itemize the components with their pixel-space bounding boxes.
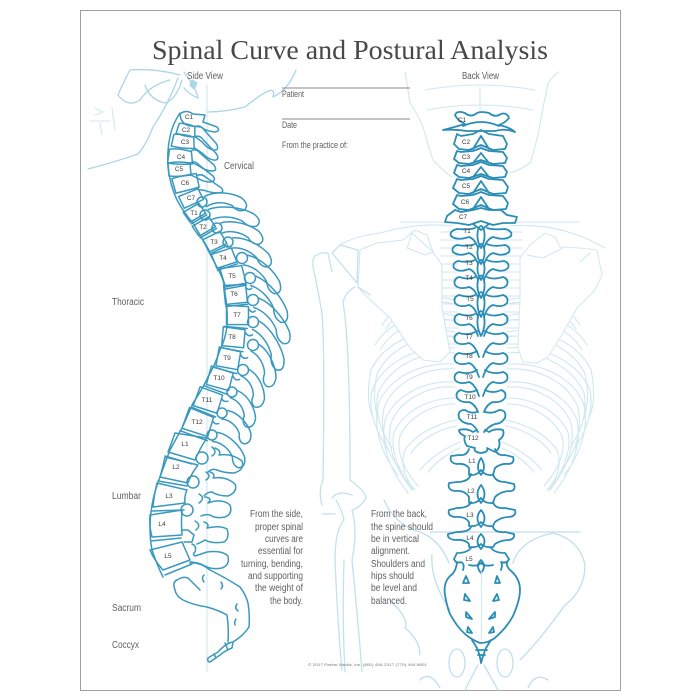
front edge of vertebral column bbox=[150, 113, 227, 577]
T8 side bbox=[219, 327, 281, 388]
C2 side bbox=[176, 122, 221, 151]
T12 side bbox=[180, 407, 250, 470]
C5 side bbox=[168, 162, 214, 182]
side view paragraph: the weight of bbox=[255, 583, 303, 594]
T2 back bbox=[452, 244, 510, 264]
side view paragraph: the body. bbox=[270, 596, 303, 607]
side view paragraph: curves are bbox=[265, 534, 303, 545]
T12 back bbox=[459, 429, 504, 453]
C7 back bbox=[445, 208, 517, 230]
C3 side bbox=[171, 133, 220, 161]
T11 side: T11 bbox=[202, 397, 213, 404]
T10 back bbox=[456, 390, 506, 412]
T11 side bbox=[191, 386, 256, 446]
back view paragraph: alignment. bbox=[371, 546, 410, 557]
L1 back: L1 bbox=[468, 458, 476, 465]
back view paragraph: be level and bbox=[371, 583, 417, 594]
L5 side: L5 bbox=[164, 553, 172, 560]
region labels: Cervical bbox=[224, 161, 254, 172]
T4 side: T4 bbox=[219, 255, 227, 262]
page frame bbox=[80, 10, 620, 690]
L2 back bbox=[449, 474, 515, 503]
L3 back: L3 bbox=[466, 512, 474, 519]
T9 side bbox=[213, 347, 269, 409]
ribcage, left side bbox=[368, 232, 460, 493]
L2 back: L2 bbox=[467, 488, 475, 495]
region labels: Thoracic bbox=[112, 297, 144, 308]
pelvis bbox=[384, 500, 585, 690]
L3 side: L3 bbox=[165, 493, 173, 500]
back view paragraph: be in vertical bbox=[371, 534, 419, 545]
L1 side: L1 bbox=[181, 441, 189, 448]
T6 back bbox=[454, 311, 508, 336]
T3 side: T3 bbox=[210, 239, 218, 246]
C5 back: C5 bbox=[462, 183, 471, 190]
C7 side bbox=[179, 188, 248, 211]
T2 back: T2 bbox=[465, 244, 473, 251]
T3 side bbox=[203, 231, 276, 269]
sacrum back bbox=[445, 562, 520, 643]
C2 back: C2 bbox=[462, 139, 471, 146]
C1 back: C1 bbox=[458, 117, 467, 124]
side view paragraph: essential for bbox=[258, 546, 304, 557]
back view spine bbox=[443, 112, 520, 663]
C6 side: C6 bbox=[181, 180, 190, 187]
L4 side: L4 bbox=[158, 521, 166, 528]
C6 back bbox=[453, 192, 508, 210]
T4 side bbox=[211, 248, 286, 296]
side view label: Side View bbox=[187, 71, 224, 82]
back view label: Back View bbox=[462, 71, 500, 82]
T7 back bbox=[454, 331, 508, 357]
region labels: Sacrum bbox=[112, 603, 141, 614]
C6 back: C6 bbox=[461, 199, 470, 206]
T6 side: T6 bbox=[230, 291, 238, 298]
coccyx back bbox=[472, 640, 491, 663]
back view paragraph: Shoulders and bbox=[371, 559, 425, 570]
side view spine bbox=[150, 112, 296, 662]
T6 back: T6 bbox=[465, 315, 473, 322]
T9 back bbox=[454, 370, 508, 396]
T11 back: T11 bbox=[467, 414, 478, 421]
C7 side: C7 bbox=[187, 195, 196, 202]
T5 back: T5 bbox=[466, 296, 474, 303]
T3 back bbox=[454, 260, 508, 280]
C4 back: C4 bbox=[462, 168, 471, 175]
T2 side bbox=[192, 216, 266, 246]
T7 side: T7 bbox=[233, 312, 241, 319]
C1 back bbox=[443, 112, 515, 132]
L1 back bbox=[451, 449, 514, 475]
L2 side bbox=[158, 457, 236, 496]
C2 side: C2 bbox=[182, 127, 191, 134]
region labels bbox=[112, 161, 254, 651]
region labels: Coccyx bbox=[112, 640, 139, 651]
patient form fields: Patient bbox=[282, 89, 304, 99]
side view paragraph: and supporting bbox=[248, 571, 303, 582]
sacrum and coccyx side bbox=[174, 563, 249, 662]
T7 back: T7 bbox=[465, 334, 473, 341]
patient form fields bbox=[282, 88, 410, 150]
side view paragraph bbox=[241, 509, 304, 607]
T10 side bbox=[204, 366, 260, 429]
arm bones bbox=[313, 245, 370, 672]
C1 side: C1 bbox=[185, 114, 194, 121]
L5 side bbox=[150, 542, 228, 575]
side view paragraph: From the side, bbox=[250, 509, 303, 520]
T1 side: T1 bbox=[190, 210, 198, 217]
patient form fields: From the practice of: bbox=[282, 140, 348, 150]
L4 back: L4 bbox=[466, 535, 474, 542]
back view paragraph bbox=[371, 509, 433, 607]
T8 side: T8 bbox=[228, 334, 236, 341]
C6 side bbox=[172, 173, 223, 194]
vertical reference line through sacrum bbox=[480, 572, 482, 640]
title: Spinal Curve and Postural Analysis bbox=[152, 35, 548, 65]
patient form fields: Date bbox=[282, 120, 297, 130]
region labels: Lumbar bbox=[112, 491, 142, 502]
side view paragraph: turning, bending, bbox=[241, 559, 303, 570]
vertical reference line, side view bbox=[206, 85, 208, 672]
T11 back bbox=[459, 410, 505, 432]
right shoulder blade bbox=[518, 233, 602, 363]
C2 back bbox=[454, 130, 507, 150]
T3 back: T3 bbox=[465, 260, 473, 267]
skull and neck, side view bbox=[88, 70, 296, 169]
T10 side: T10 bbox=[213, 375, 225, 382]
L5 back bbox=[454, 548, 509, 573]
T12 side: T12 bbox=[191, 419, 203, 426]
C5 side: C5 bbox=[175, 166, 184, 173]
C7 back: C7 bbox=[459, 214, 468, 221]
C3 back: C3 bbox=[462, 154, 471, 161]
T12 back: T12 bbox=[467, 435, 479, 442]
back view paragraph: hips should bbox=[371, 571, 414, 582]
T5 back bbox=[454, 292, 508, 317]
copyright footer: © 2017 Parker Media, Inc. (800) 494-2317 (770) 494-9801 bbox=[308, 662, 428, 667]
T5 side bbox=[220, 265, 294, 325]
T2 side: T2 bbox=[199, 224, 207, 231]
left shoulder blade bbox=[358, 230, 450, 362]
L4 back bbox=[448, 527, 514, 549]
L4 side bbox=[150, 510, 228, 544]
skull and neck, back view bbox=[405, 72, 558, 177]
L2 side: L2 bbox=[172, 464, 180, 471]
T1 side bbox=[183, 203, 261, 228]
L5 back: L5 bbox=[465, 556, 473, 563]
C1 side bbox=[180, 112, 219, 132]
C4 side bbox=[168, 148, 216, 171]
T7 side bbox=[224, 305, 290, 372]
C4 side: C4 bbox=[177, 154, 186, 161]
T1 back: T1 bbox=[463, 228, 471, 235]
T9 side: T9 bbox=[223, 355, 231, 362]
T8 back bbox=[454, 351, 508, 377]
side view paragraph: proper spinal bbox=[255, 522, 303, 533]
C3 back bbox=[454, 148, 507, 164]
L3 back bbox=[449, 502, 515, 527]
T6 side bbox=[224, 284, 296, 346]
C5 back bbox=[453, 176, 508, 194]
T8 back: T8 bbox=[465, 353, 473, 360]
T4 back: T4 bbox=[465, 275, 473, 282]
back view paragraph: From the back, bbox=[371, 509, 427, 520]
L3 side bbox=[152, 483, 231, 518]
T5 side: T5 bbox=[228, 273, 236, 280]
T1 back bbox=[451, 226, 511, 248]
T10 back: T10 bbox=[464, 394, 476, 401]
T9 back: T9 bbox=[465, 374, 473, 381]
back view paragraph: the spine should bbox=[371, 522, 433, 533]
clavicles and acromion lines bbox=[340, 222, 605, 262]
L1 side bbox=[165, 433, 243, 473]
C4 back bbox=[454, 162, 507, 178]
back view paragraph: balanced. bbox=[371, 596, 407, 607]
ribcage, right side bbox=[502, 232, 594, 493]
C3 side: C3 bbox=[181, 139, 190, 146]
T4 back bbox=[454, 275, 508, 298]
